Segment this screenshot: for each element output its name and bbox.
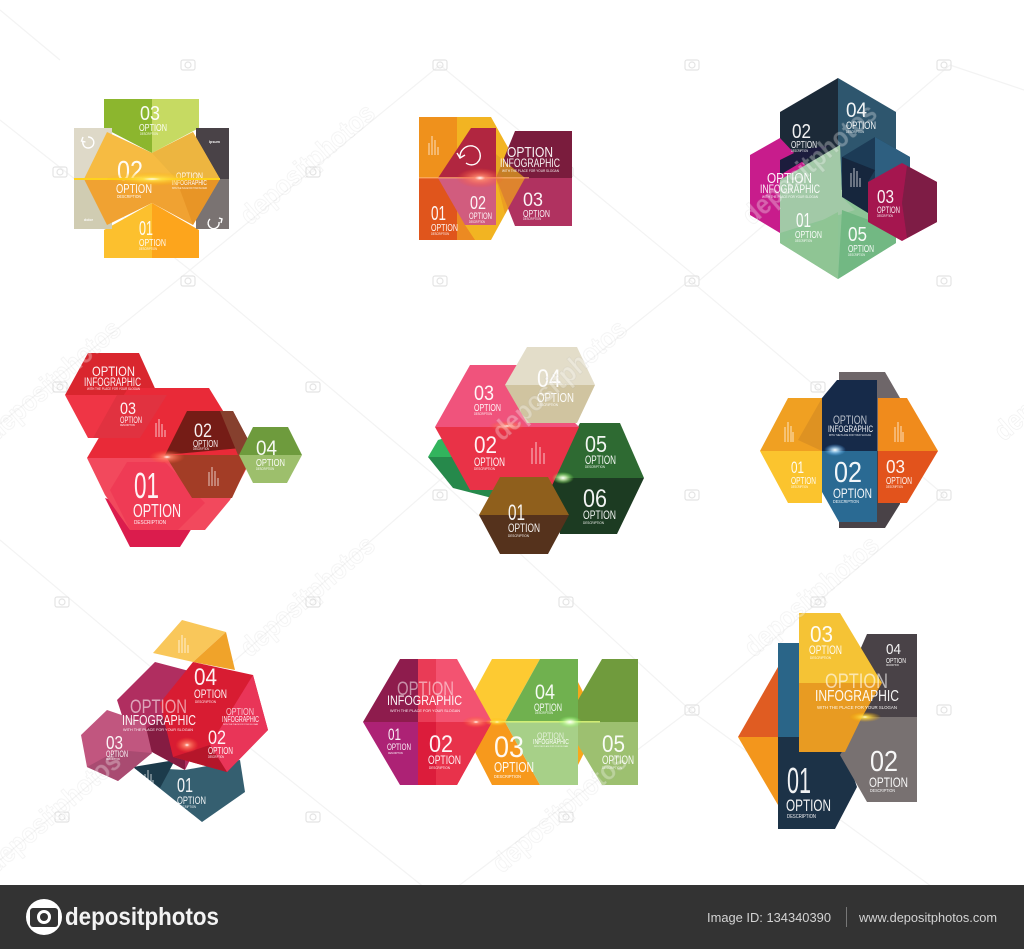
- heading block: INFOGRAPHIC: [828, 424, 873, 435]
- number block 01: OPTION: [508, 521, 540, 535]
- icon: bars: [532, 442, 544, 464]
- number block 03: 03: [523, 190, 543, 211]
- number block 04: [886, 641, 906, 667]
- number block 06: 06: [583, 485, 607, 513]
- number block 01: [139, 218, 166, 251]
- number block 02: 02: [429, 731, 453, 758]
- number block 05: OPTION: [585, 453, 616, 467]
- number block 01: [387, 725, 411, 755]
- glare: [462, 716, 600, 728]
- number block 03: DESCRIPTION: [523, 217, 542, 221]
- heading block: INFOGRAPHIC: [815, 688, 899, 705]
- number block 04: DESCRIPTION: [846, 130, 864, 134]
- icon: bars: [156, 419, 165, 437]
- logo wordmark: depositphotos: [65, 903, 219, 931]
- number block 05: [585, 431, 616, 469]
- option infographic heading: INFOGRAPHIC: [172, 178, 207, 187]
- number block 05: [602, 731, 634, 770]
- number block 02: 02: [117, 155, 143, 186]
- number block 01: 01: [177, 775, 193, 797]
- number block 02: 02: [792, 121, 811, 143]
- small heading block: OPTION: [226, 707, 254, 718]
- number block 03: DESCRIPTION: [106, 757, 120, 761]
- icon: bars: [179, 635, 188, 653]
- number block 01: DESCRIPTION: [177, 805, 197, 809]
- number block 03: DESCRIPTION: [120, 423, 135, 427]
- number block 01: OPTION: [791, 476, 816, 487]
- number block 02: DESCRIPTION: [208, 755, 225, 759]
- number block 04: 04: [535, 681, 555, 704]
- number block 01: OPTION: [177, 795, 206, 807]
- number block 02: [208, 728, 233, 759]
- graphic 9: tall column cluster: [738, 613, 917, 829]
- number block 03: OPTION: [809, 643, 842, 657]
- icon: bars: [145, 770, 153, 787]
- number block 02: 02: [470, 193, 486, 213]
- number block 03: [886, 457, 912, 489]
- watermark: depositphotos repeated: depositphotos: [736, 97, 883, 231]
- number block 05: DESCRIPTION: [848, 253, 865, 257]
- number block 01: DESCRIPTION: [134, 520, 166, 526]
- number block 01: DESCRIPTION: [795, 239, 812, 243]
- number block 01: OPTION: [431, 223, 458, 234]
- small labels: Ipsum: [209, 139, 220, 144]
- number block 04: OPTION: [194, 687, 227, 701]
- number block 03: 03: [120, 399, 136, 418]
- watermark: depositphotos repeated: depositphotos: [234, 529, 381, 663]
- watermark: depositphotos repeated: depositphotos: [486, 745, 633, 879]
- number block 05: 05: [585, 431, 607, 457]
- heading block: INFOGRAPHIC: [122, 712, 196, 729]
- number block 03: OPTION: [474, 403, 501, 414]
- number block 01: DESCRIPTION: [431, 232, 449, 236]
- number block 04: 04: [256, 437, 277, 460]
- icon: bars: [785, 422, 793, 442]
- number block 03: DESCRIPTION: [494, 774, 521, 779]
- number block 01: OPTION: [133, 501, 181, 521]
- heading block: WITH THE PLACE FOR YOUR SLOGAN: [123, 727, 193, 732]
- number block 03: DESCRIPTION: [877, 214, 894, 218]
- number block 01: DESCRIPTION: [508, 534, 529, 538]
- number block 02: 02: [834, 457, 862, 489]
- number block 03: OPTION: [886, 476, 912, 487]
- graphic 3: navy green magenta hexagons: [750, 78, 937, 279]
- number block 03: OPTION: [523, 209, 550, 220]
- number block 03: [474, 382, 501, 416]
- graphic 2: orange and crimson: [419, 117, 572, 240]
- number block 03: [106, 733, 128, 761]
- heading block: WITH THE PLACE FOR YOUR SLOGAN: [390, 708, 460, 713]
- number block 01: 01: [388, 725, 401, 744]
- number block 03: OPTION: [120, 415, 142, 425]
- number block 03: OPTION: [139, 123, 167, 134]
- number block 04: OPTION: [537, 390, 574, 405]
- heading block: WITH THE PLACE FOR YOUR SLOGAN: [817, 705, 897, 710]
- number block 04: [846, 99, 876, 134]
- heading block: INFOGRAPHIC: [387, 692, 462, 708]
- watermark: depositphotos repeated: depositphotos: [738, 529, 885, 663]
- number block 02: [474, 432, 505, 471]
- number block 03: 03: [494, 731, 524, 764]
- number block 04: OPTION: [886, 656, 906, 665]
- number block 03: 03: [886, 457, 905, 477]
- number block 06: DESCRIPTION: [583, 521, 604, 525]
- graphic 4: red hexagons: [65, 353, 302, 547]
- number block 02: DESCRIPTION: [474, 467, 495, 471]
- number block 01: 01: [796, 210, 811, 232]
- heading block: [500, 144, 560, 173]
- graphic 8: horizontal chain: [363, 659, 638, 785]
- option infographic heading: WITH THE PLACE FOR YOUR SLOGAN: [172, 186, 207, 190]
- number block 04: DESCRIPTION: [256, 467, 275, 471]
- heading block: OPTION: [825, 670, 888, 693]
- number block 04: 04: [537, 365, 561, 393]
- number block 02: DESCRIPTION: [833, 499, 859, 504]
- glare: [489, 421, 574, 484]
- number block 01: OPTION: [786, 796, 831, 815]
- logo: camera: [26, 899, 62, 935]
- number block 05: DESCRIPTION: [602, 766, 622, 770]
- number block 04: DESCRIPTION: [537, 402, 558, 407]
- small heading block: [533, 731, 569, 748]
- number block 04: [194, 664, 227, 704]
- number block 01: 01: [431, 203, 446, 225]
- number block 05: 05: [602, 731, 625, 758]
- small labels: [84, 139, 220, 222]
- heading block: INFOGRAPHIC: [500, 156, 560, 170]
- number block 02: 02: [208, 728, 226, 749]
- number block 02: OPTION: [869, 774, 908, 790]
- number block 02: 02: [194, 421, 212, 442]
- number block 02: [428, 731, 461, 770]
- number block 01: DESCRIPTION: [388, 751, 403, 755]
- number block 01: OPTION: [139, 238, 166, 249]
- icon: circular arrows: [457, 146, 480, 165]
- number block 01: [791, 458, 816, 489]
- number block 01: DESCRIPTION: [139, 247, 157, 251]
- glare: [149, 450, 185, 464]
- small heading block: INFOGRAPHIC: [222, 715, 259, 724]
- number block 05: OPTION: [602, 753, 634, 767]
- number block 03: [494, 731, 534, 779]
- number block 04: OPTION: [256, 458, 285, 469]
- number block 01: [786, 760, 831, 820]
- graphic 1: orange cross: [74, 99, 229, 258]
- number block 01: [508, 500, 540, 538]
- number block 02: OPTION: [833, 485, 872, 501]
- number block 04: [256, 437, 285, 471]
- number block 02: OPTION: [116, 181, 152, 196]
- number block 03: OPTION: [106, 749, 128, 759]
- number block 01: 01: [134, 465, 159, 506]
- number block 05: [848, 224, 874, 257]
- heading block: [815, 670, 899, 710]
- number block 03: DESCRIPTION: [140, 132, 158, 136]
- option infographic heading: [172, 171, 207, 190]
- watermark: depositphotos repeated: depositphotos: [234, 97, 381, 231]
- number block 03: 03: [106, 733, 123, 753]
- number block 02: DESCRIPTION: [870, 788, 895, 793]
- number block 04: DESCRIPTION: [886, 664, 899, 667]
- number block 02: [116, 155, 152, 199]
- number block 03: [877, 187, 900, 218]
- number block 06: [583, 485, 616, 525]
- small heading block: [222, 707, 259, 726]
- number block 03: [809, 621, 842, 660]
- watermark: depositphotos repeated: depositphotos: [486, 313, 633, 447]
- heading block: [828, 413, 873, 437]
- icon: bars: [851, 168, 860, 187]
- small heading block: INFOGRAPHIC: [533, 739, 569, 746]
- number block 05: 05: [848, 224, 867, 246]
- small heading block: WITH THE PLACE FOR YOUR SLOGAN: [534, 745, 569, 748]
- number block 02: DESCRIPTION: [469, 220, 486, 224]
- number block 04: [534, 681, 562, 715]
- number block 03: OPTION: [494, 759, 534, 776]
- graphic 7: cube cluster: [81, 620, 268, 822]
- number block 03: DESCRIPTION: [886, 485, 904, 489]
- number block 03: [139, 103, 167, 136]
- number block 02: DESCRIPTION: [791, 149, 808, 153]
- number block 01: [177, 775, 206, 809]
- number block 03: [120, 399, 142, 427]
- number block 02: [833, 457, 872, 504]
- heading block: WITH THE PLACE FOR YOUR SLOGAN: [502, 169, 559, 173]
- small heading block: OPTION: [537, 731, 564, 741]
- number block 02: 02: [870, 746, 898, 778]
- heading block: [760, 170, 820, 199]
- number block 02: [791, 121, 817, 153]
- number block 03: 03: [877, 187, 894, 207]
- heading block: OPTION: [92, 363, 135, 379]
- heading block: OPTION: [507, 144, 553, 161]
- glare: [419, 168, 529, 188]
- heading block: [387, 679, 462, 713]
- small heading block: WITH THE PLACE FOR YOUR SLOGAN: [223, 723, 258, 726]
- glare: [175, 737, 199, 753]
- graphic 5: six hexagons: [428, 347, 644, 554]
- number block 06: OPTION: [583, 508, 616, 522]
- number block 02: 02: [474, 432, 497, 459]
- number block 04: OPTION: [846, 120, 876, 132]
- number block 01: DESCRIPTION: [787, 814, 816, 820]
- number block 04: 04: [846, 99, 867, 122]
- number block 02: OPTION: [208, 746, 233, 757]
- number block 05: OPTION: [848, 244, 874, 255]
- number block 04: DESCRIPTION: [535, 711, 554, 715]
- number block 04: 04: [194, 664, 217, 691]
- number block 02: OPTION: [428, 753, 461, 767]
- footer bar: [0, 885, 1024, 949]
- heading block: [84, 363, 141, 391]
- icon: bars: [895, 422, 903, 442]
- icon: bars: [209, 467, 218, 486]
- glare: [849, 712, 881, 722]
- heading block: OPTION: [767, 170, 812, 187]
- number block 01: 01: [139, 218, 153, 240]
- heading block: WITH THE PLACE FOR YOUR SLOGAN: [87, 387, 141, 391]
- heading block: INFOGRAPHIC: [760, 182, 820, 196]
- option infographic heading: OPTION: [176, 171, 203, 182]
- number block 01: 01: [791, 458, 804, 477]
- number block 03: 03: [140, 103, 160, 125]
- heading block: OPTION: [130, 697, 187, 718]
- heading block: WITH THE PLACE FOR YOUR SLOGAN: [829, 433, 871, 437]
- image id: Image ID: 134340390: [707, 910, 831, 925]
- number block 01: 01: [508, 500, 525, 525]
- number block 04: 04: [886, 641, 901, 658]
- number block 04: DESCRIPTION: [195, 700, 216, 704]
- number block 03: DESCRIPTION: [810, 656, 831, 660]
- number block 01: OPTION: [795, 230, 822, 241]
- number block 04: OPTION: [534, 702, 562, 714]
- number block 02: DESCRIPTION: [193, 447, 210, 451]
- heading block: OPTION: [397, 679, 454, 700]
- glare: [824, 444, 846, 456]
- number block 04: [537, 365, 574, 407]
- number block 02: [869, 746, 908, 793]
- icon: bars: [429, 136, 438, 155]
- number block 02: DESCRIPTION: [117, 194, 141, 199]
- heading block: INFOGRAPHIC: [84, 377, 141, 389]
- number block 03: OPTION: [877, 205, 900, 215]
- small labels: dolor: [84, 217, 93, 222]
- glare: [74, 172, 220, 186]
- number block 01: 01: [787, 760, 811, 801]
- number block 03: DESCRIPTION: [474, 412, 492, 416]
- number block 02: DESCRIPTION: [429, 766, 450, 770]
- number block 03: [523, 190, 550, 221]
- website url: www.depositphotos.com: [858, 910, 997, 925]
- number block 01: OPTION: [387, 742, 411, 753]
- number block 02: [193, 421, 218, 451]
- number block 02: [469, 193, 492, 224]
- number block 02: OPTION: [193, 439, 218, 450]
- number block 01: [795, 210, 822, 243]
- heading block: OPTION: [833, 413, 867, 427]
- number block 03: 03: [474, 382, 494, 405]
- number block 02: OPTION: [469, 211, 492, 221]
- number block 05: DESCRIPTION: [585, 465, 605, 469]
- heading block: [122, 697, 196, 732]
- graphic 6: orange and navy columns: [760, 372, 938, 528]
- number block 02: OPTION: [474, 455, 505, 469]
- number block 01: DESCRIPTION: [791, 485, 809, 489]
- number block 02: OPTION: [791, 140, 817, 151]
- number block 01: [133, 465, 181, 526]
- heading block: WITH THE PLACE FOR YOUR SLOGAN: [762, 195, 819, 199]
- icon: circular arrows: [82, 137, 222, 229]
- number block 01: [431, 203, 458, 236]
- number block 03: 03: [810, 621, 833, 647]
